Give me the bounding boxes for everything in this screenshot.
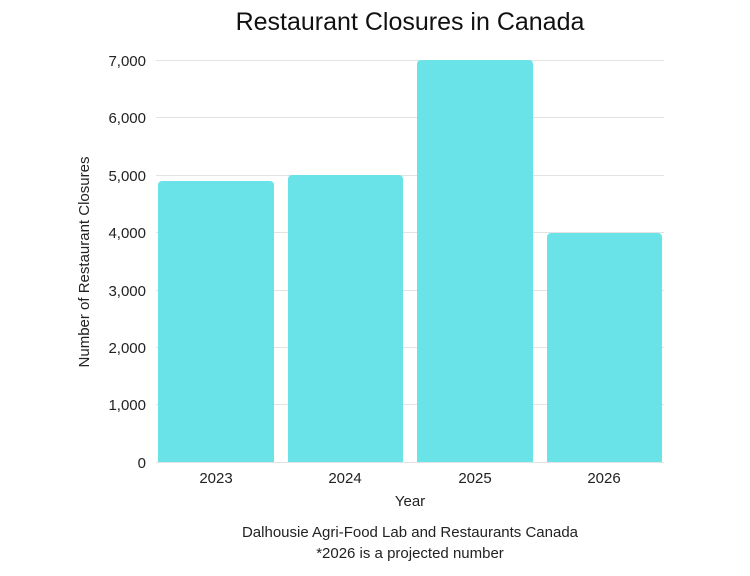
x-axis labels: 2023	[199, 470, 233, 487]
source note: Dalhousie Agri-Food Lab and Restaurants Canada	[242, 524, 579, 541]
y-axis tick labels: 1,000	[108, 397, 146, 414]
source note: *2026 is a projected number	[316, 545, 504, 562]
x-axis labels: 2026	[587, 470, 621, 487]
y-axis tick labels	[108, 53, 146, 472]
y-axis tick labels: 2,000	[108, 340, 146, 357]
y-axis tick labels: 3,000	[108, 283, 146, 300]
bar chart	[158, 60, 662, 462]
title: Restaurant Closures in Canada	[236, 8, 584, 36]
x-axis title: Year	[395, 493, 425, 510]
y-axis tick labels: 6,000	[108, 110, 146, 127]
source note	[242, 524, 579, 562]
x-axis labels: 2025	[458, 470, 492, 487]
y-axis tick labels: 0	[138, 455, 146, 472]
x-axis labels: 2024	[328, 470, 362, 487]
y-axis tick labels: 4,000	[108, 225, 146, 242]
y-axis tick labels: 7,000	[108, 53, 146, 70]
x-axis labels	[199, 470, 621, 487]
y-axis tick labels: 5,000	[108, 168, 146, 185]
y-axis label: Number of Restaurant Closures	[76, 157, 93, 367]
